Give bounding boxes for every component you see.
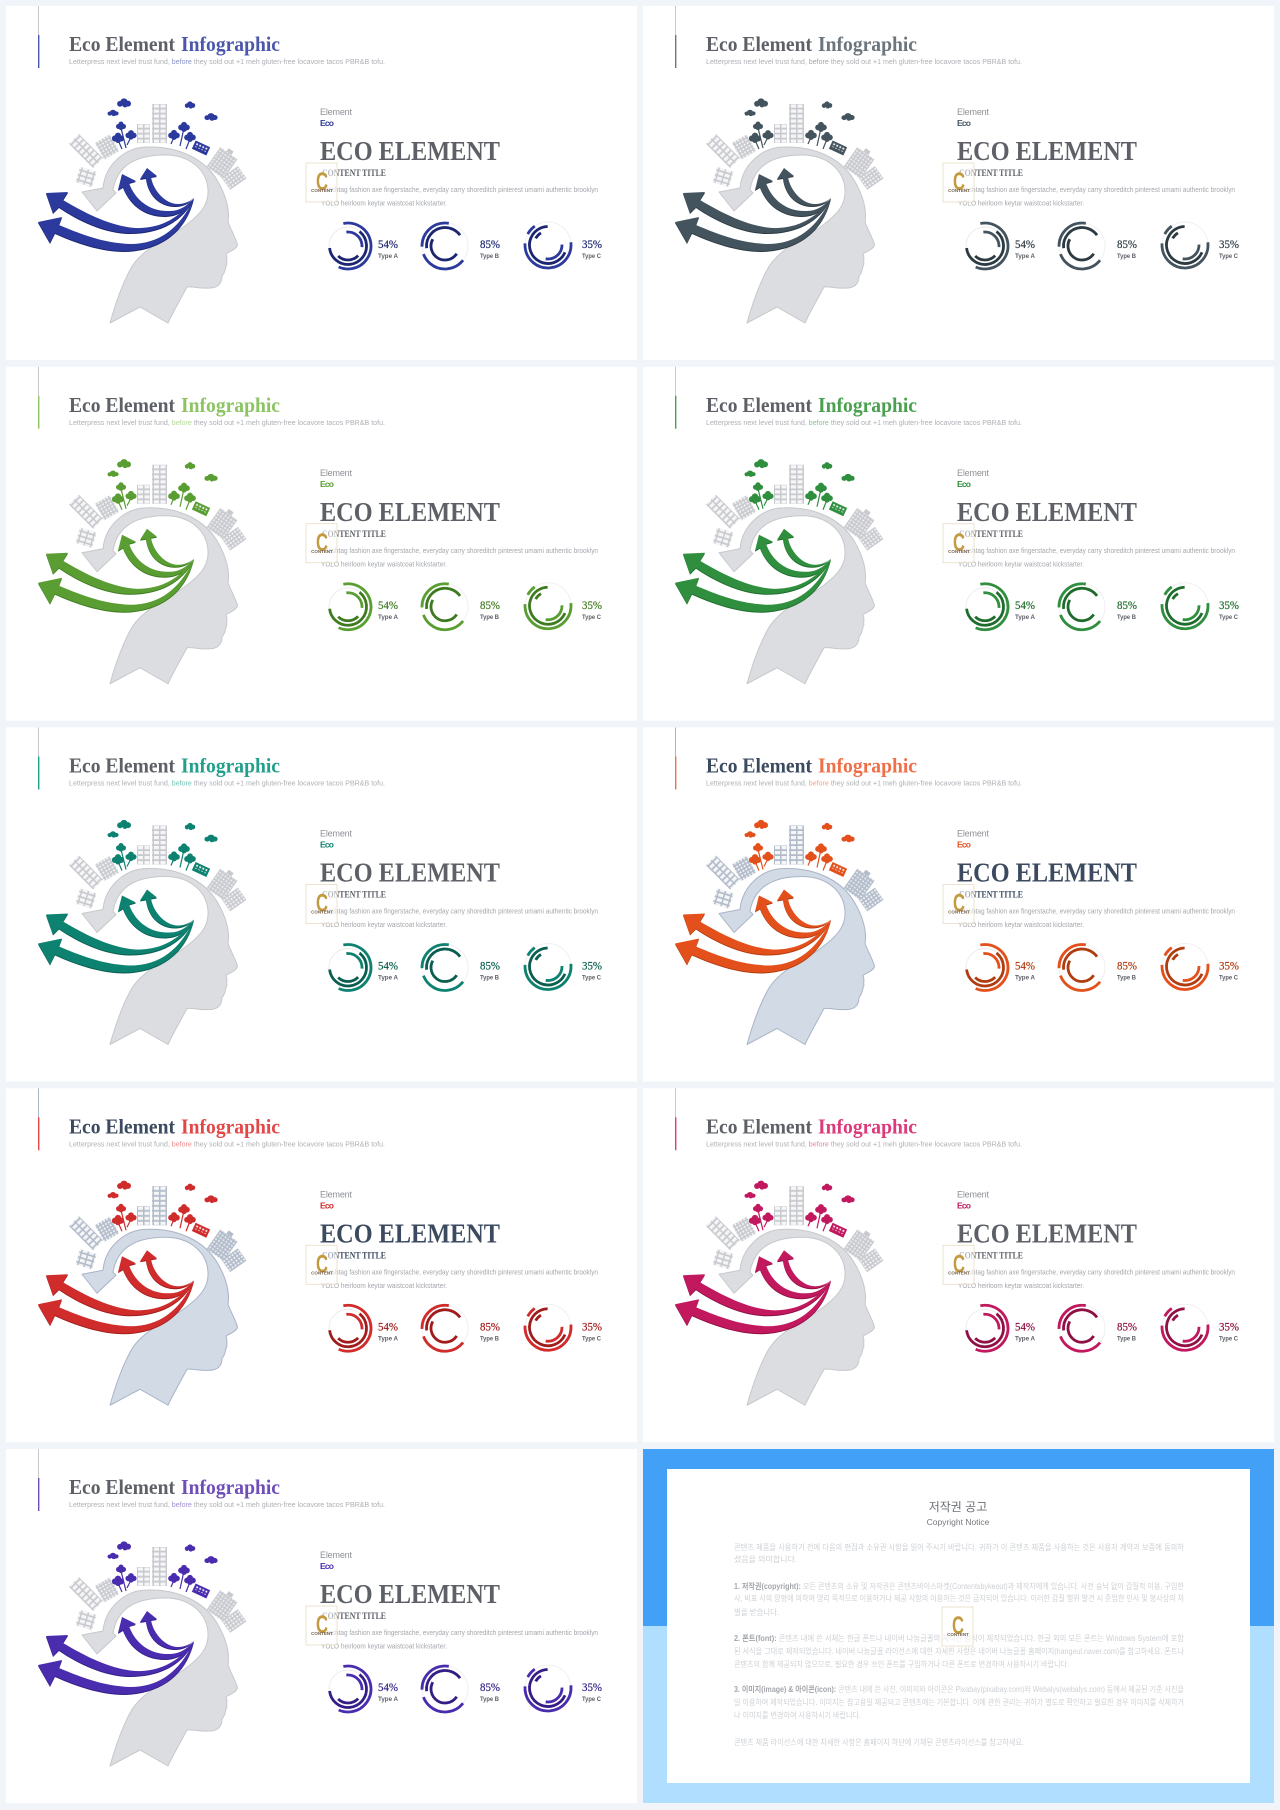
text block: YOLO heirloom keytar waistcoat kickstarter. <box>958 920 1084 929</box>
donut chart B: 85% <box>480 1321 500 1333</box>
accent line <box>38 6 39 68</box>
accent line <box>675 728 676 790</box>
donut chart B: Type B <box>480 974 499 982</box>
text block: CONTENT TITLE <box>959 890 1023 900</box>
text block: Eco <box>320 479 334 489</box>
notice body text: 콘텐츠의 함께 제공되지 않으므로, 필요한 경우 쓰인 폰트를 구입하거나 다른 폰트로 변경하여 사용하시기 바랍니다. <box>734 1659 1069 1669</box>
donut chart B: 85% <box>480 960 500 972</box>
heading: Eco Element <box>69 1114 175 1138</box>
text block <box>320 828 598 929</box>
text block <box>957 1189 1235 1290</box>
watermark <box>943 163 974 202</box>
donut chart C <box>517 1296 602 1359</box>
donut chart B <box>413 1296 500 1361</box>
watermark <box>943 1245 974 1284</box>
illustration: head with arrows and city <box>38 459 246 684</box>
donut chart B: Type B <box>1117 253 1136 260</box>
text block: ECO ELEMENT <box>320 1579 500 1609</box>
text block <box>957 107 1235 208</box>
accent line <box>38 728 39 790</box>
donut chart A: Type A <box>1015 253 1035 260</box>
heading: Eco Element <box>706 1114 812 1138</box>
donut chart C <box>1154 935 1239 998</box>
text block: Eco <box>320 118 334 128</box>
notice body text: 3. 이미지(image) & 아이콘(icon): 콘텐츠 내에 쓴 사진, 이미지와 아이콘은 Pixabay(pixabay.com)와 Webalys(webalys.com) 등에서 제공된 기준 사진을 <box>734 1684 1184 1694</box>
heading: Eco Element <box>69 32 175 56</box>
heading: Eco Element <box>706 32 812 56</box>
text block: YOLO heirloom keytar waistcoat kickstarter. <box>321 559 447 568</box>
donut chart A: 54% <box>1015 1321 1035 1333</box>
donut chart C: Type C <box>1219 974 1238 982</box>
text block: ECO ELEMENT <box>320 136 500 166</box>
notice body text: 벌을 받습니다. <box>734 1607 779 1617</box>
accent line <box>675 367 676 429</box>
notice body text: 1. 저작권(copyright): 모든 콘텐츠의 소유 및 저작권은 콘텐츠바이스마켓(Contentsbykeout)과 제작자에게 있습니다. 사전 승낙 없이 갑질적 이용, 구입한 <box>734 1581 1185 1591</box>
donut chart C: 35% <box>582 960 602 972</box>
donut chart B: Type B <box>1117 1335 1136 1342</box>
donut chart C: 35% <box>582 239 602 251</box>
text block: ECO ELEMENT <box>320 858 500 888</box>
text block <box>957 468 1235 568</box>
donut chart C: 35% <box>582 600 602 612</box>
text block: Element <box>320 1189 352 1199</box>
text block: Element <box>320 828 352 838</box>
notice body text <box>734 1542 1185 1747</box>
text block: CONTENT TITLE <box>322 890 386 900</box>
donut chart C <box>1154 1296 1239 1359</box>
text block: CONTENT TITLE <box>959 1251 1023 1261</box>
text block <box>320 468 598 568</box>
donut chart A <box>958 941 1035 994</box>
text block: ECO ELEMENT <box>957 858 1137 888</box>
donut chart A: Type A <box>378 253 398 260</box>
heading: Eco Element <box>69 1475 175 1499</box>
subtitle: Letterpress next level trust fund, before they sold out +1 meh gluten-free locavore tacos PBR&B tofu. <box>69 778 385 788</box>
text block: #Hashtag fashion axe fingerstache, everyday carry shoreditch pinterest umami authentic brooklyn <box>320 185 598 194</box>
donut chart B <box>1050 574 1137 639</box>
text block: YOLO heirloom keytar waistcoat kickstarter. <box>321 1642 447 1650</box>
watermark <box>306 163 337 202</box>
heading: Infographic <box>181 393 280 417</box>
text block: Eco <box>957 840 971 850</box>
illustration: head with arrows and city <box>38 1181 246 1405</box>
illustration: head with arrows and city <box>675 1181 883 1405</box>
heading: Infographic <box>818 754 917 778</box>
heading: Infographic <box>818 1114 917 1138</box>
panel: orange infographic <box>643 728 1274 1082</box>
donut chart C: Type C <box>582 974 601 982</box>
donut chart B <box>1050 214 1137 278</box>
notice subtitle: Copyright Notice <box>927 1517 990 1527</box>
text block: Eco <box>320 1561 334 1571</box>
donut chart A: 54% <box>378 600 398 612</box>
text block: CONTENT TITLE <box>322 169 386 179</box>
text block: Eco <box>320 840 334 850</box>
heading: Infographic <box>181 754 280 778</box>
text block: Element <box>957 468 989 478</box>
donut chart C: Type C <box>582 614 601 621</box>
donut chart C: 35% <box>582 1682 602 1694</box>
illustration: head with arrows and city <box>38 98 246 323</box>
text block: YOLO heirloom keytar waistcoat kickstarter. <box>958 198 1084 208</box>
donut chart B: Type B <box>1117 614 1136 621</box>
text block: CONTENT TITLE <box>322 530 386 540</box>
text block <box>320 1550 598 1650</box>
donut chart A: Type A <box>378 614 398 621</box>
donut chart C <box>517 1657 602 1719</box>
donut chart B: 85% <box>480 600 500 612</box>
donut chart A <box>958 219 1035 273</box>
donut chart A: 54% <box>1015 239 1035 251</box>
donut chart A: 54% <box>378 960 398 972</box>
notice body text: 사, 비표 사의 양형에 의하여 영리 목적으로 이용하거나 제공 사항의 이용하는 것은 금지되어 있습니다. 이러한 갑질 행위 발견 시 준엄한 민사 및 형사상의 처 <box>734 1593 1184 1603</box>
donut chart B: Type B <box>480 1335 499 1342</box>
watermark <box>942 1607 973 1646</box>
accent line <box>38 1088 39 1150</box>
heading: Infographic <box>818 393 917 417</box>
text block: ECO ELEMENT <box>320 497 500 527</box>
accent line <box>38 367 39 429</box>
text block: #Hashtag fashion axe fingerstache, everyday carry shoreditch pinterest umami authentic brooklyn <box>957 546 1235 555</box>
notice body text: 셨음을 의미합니다. <box>734 1554 797 1564</box>
heading: Eco Element <box>69 754 175 778</box>
heading: Eco Element <box>706 393 812 417</box>
donut chart C <box>517 935 602 998</box>
text block: YOLO heirloom keytar waistcoat kickstarter. <box>958 1281 1084 1290</box>
watermark <box>943 524 974 563</box>
donut chart A <box>321 219 398 273</box>
panel: blue infographic <box>6 6 637 360</box>
text block: Eco <box>957 479 971 489</box>
donut chart B: 85% <box>1117 239 1137 251</box>
text block: YOLO heirloom keytar waistcoat kickstarter. <box>958 559 1084 568</box>
text block: CONTENT TITLE <box>959 169 1023 179</box>
donut chart B: 85% <box>480 1682 500 1694</box>
donut chart A: 54% <box>1015 960 1035 972</box>
subtitle: Letterpress next level trust fund, before they sold out +1 meh gluten-free locavore tacos PBR&B tofu. <box>69 418 385 427</box>
notice body text: 2. 폰트(font): 콘텐츠 내에 쓴 서체는 한글 폰트나 네이버 나눔글꼴의 제작한 양식이 제작되었습니다. 한글 외의 모든 폰트는 Windows System에 포함 <box>734 1633 1185 1643</box>
donut chart B <box>413 935 500 1000</box>
heading: Infographic <box>181 32 280 56</box>
heading <box>706 1114 917 1138</box>
heading <box>706 393 917 417</box>
text block: CONTENT TITLE <box>959 530 1023 540</box>
text block: Element <box>320 1550 352 1560</box>
donut chart A: Type A <box>1015 974 1035 982</box>
donut chart C: Type C <box>582 1696 601 1703</box>
text block: Element <box>957 1189 989 1199</box>
donut chart A: Type A <box>378 1335 398 1342</box>
watermark <box>943 884 974 924</box>
heading <box>706 32 917 56</box>
donut chart A <box>321 1302 398 1355</box>
text block <box>957 828 1235 929</box>
text block: ECO ELEMENT <box>320 1218 500 1248</box>
text block: #Hashtag fashion axe fingerstache, everyday carry shoreditch pinterest umami authentic brooklyn <box>320 1267 598 1276</box>
donut chart A: 54% <box>378 1321 398 1333</box>
donut chart C: 35% <box>1219 239 1239 251</box>
text block <box>320 107 598 208</box>
donut chart B <box>413 574 500 639</box>
donut chart C: Type C <box>582 1335 601 1342</box>
donut chart B <box>1050 935 1137 1000</box>
text block: Element <box>957 828 989 838</box>
donut chart A: 54% <box>378 239 398 251</box>
donut chart A <box>958 1302 1035 1355</box>
donut chart C <box>1154 574 1239 637</box>
heading: Infographic <box>181 1475 280 1499</box>
notice body text: 콘텐츠 제품 라이선스에 대한 자세한 사항은 홈페이지 하단에 기재된 콘텐츠라이선스를 참고하세요. <box>734 1737 1024 1747</box>
donut chart C: 35% <box>1219 1321 1239 1333</box>
donut chart A: Type A <box>1015 614 1035 621</box>
text block: #Hashtag fashion axe fingerstache, everyday carry shoreditch pinterest umami authentic brooklyn <box>320 546 598 555</box>
subtitle: Letterpress next level trust fund, before they sold out +1 meh gluten-free locavore tacos PBR&B tofu. <box>69 1500 385 1509</box>
text block: #Hashtag fashion axe fingerstache, everyday carry shoreditch pinterest umami authentic brooklyn <box>957 185 1235 194</box>
donut chart A <box>321 941 398 994</box>
notice body text: 나 이미지를 변경하여 사용하시기 바랍니다. <box>734 1710 861 1720</box>
text block: Eco <box>957 118 971 128</box>
illustration: head with arrows and city <box>38 1541 246 1766</box>
donut chart C: Type C <box>582 253 601 260</box>
watermark <box>306 1606 337 1645</box>
text block: Eco <box>957 1200 971 1210</box>
notice body text: 된 서식을 그대로 제작되었습니다. 네이버 나눔글꼴 라이선스에 대한 자세한 사항은 네이버 나눔글꼴 홈페이지(hangeul.naver.com)를 참고하세요. 폰트나 <box>734 1646 1185 1656</box>
donut chart B: Type B <box>480 253 499 260</box>
panel: light green infographic <box>6 367 637 721</box>
donut chart A <box>958 580 1035 633</box>
text block: CONTENT TITLE <box>322 1251 386 1261</box>
subtitle: Letterpress next level trust fund, before they sold out +1 meh gluten-free locavore tacos PBR&B tofu. <box>706 1139 1022 1148</box>
watermark <box>306 1245 337 1284</box>
illustration: head with arrows and city <box>675 820 883 1044</box>
donut chart C: Type C <box>1219 1335 1238 1342</box>
donut chart A: Type A <box>1015 1335 1035 1342</box>
panel: slate infographic <box>643 6 1274 360</box>
panel: green infographic <box>643 367 1274 721</box>
notice body text: 일 이용하여 제작되었습니다. 이미지는 참고용일 제공되고 콘텐츠에는 기본합니다. 이에 관한 권리는 귀하가 별도로 확인하고 필요한 경우 이미지를 삭제하거 <box>734 1697 1184 1707</box>
donut chart C: 35% <box>1219 600 1239 612</box>
watermark <box>306 884 337 924</box>
panel: red infographic <box>6 1088 637 1442</box>
accent line <box>38 1449 39 1511</box>
donut chart B <box>413 1657 500 1721</box>
illustration: head with arrows and city <box>675 98 883 323</box>
donut chart A: 54% <box>378 1682 398 1694</box>
donut chart C <box>517 214 602 276</box>
text block <box>320 1189 598 1290</box>
donut chart C: 35% <box>1219 960 1239 972</box>
donut chart B <box>1050 1296 1137 1361</box>
text block: YOLO heirloom keytar waistcoat kickstarter. <box>321 198 447 208</box>
donut chart A: Type A <box>378 1696 398 1703</box>
donut chart A <box>321 1662 398 1716</box>
donut chart B: 85% <box>1117 960 1137 972</box>
text block: CONTENT TITLE <box>322 1612 386 1622</box>
donut chart C: Type C <box>1219 253 1238 260</box>
heading <box>69 32 280 56</box>
text block: YOLO heirloom keytar waistcoat kickstarter. <box>321 1281 447 1290</box>
donut chart C: 35% <box>582 1321 602 1333</box>
panel: teal infographic <box>6 728 637 1082</box>
subtitle: Letterpress next level trust fund, before they sold out +1 meh gluten-free locavore tacos PBR&B tofu. <box>706 418 1022 427</box>
watermark <box>306 524 337 563</box>
subtitle: Letterpress next level trust fund, before they sold out +1 meh gluten-free locavore tacos PBR&B tofu. <box>69 1139 385 1148</box>
heading <box>69 1475 280 1499</box>
donut chart C <box>517 574 602 637</box>
donut chart A: 54% <box>1015 600 1035 612</box>
donut chart B <box>413 214 500 278</box>
illustration: head with arrows and city <box>38 820 246 1044</box>
donut chart B: Type B <box>480 614 499 621</box>
heading: Eco Element <box>69 393 175 417</box>
donut chart B: Type B <box>1117 974 1136 982</box>
heading <box>69 1114 280 1138</box>
heading: Eco Element <box>706 754 812 778</box>
text block: ECO ELEMENT <box>957 497 1137 527</box>
donut chart C <box>1154 214 1239 276</box>
text block: Element <box>320 107 352 117</box>
panel: purple infographic <box>6 1449 637 1803</box>
text block: #Hashtag fashion axe fingerstache, everyday carry shoreditch pinterest umami authentic brooklyn <box>320 906 598 916</box>
panel: magenta infographic <box>643 1088 1274 1442</box>
notice body text: 콘텐츠 제품을 사용하기 전에 다음의 편집과 소유권 사항을 읽어 주시기 바랍니다. 귀하가 이 콘텐츠 제품을 사용하는 것은 사용자 계약과 보증에 동의하 <box>734 1542 1185 1552</box>
donut chart A: Type A <box>378 974 398 982</box>
donut chart B: 85% <box>1117 600 1137 612</box>
text block: Element <box>320 468 352 478</box>
subtitle: Letterpress next level trust fund, before they sold out +1 meh gluten-free locavore tacos PBR&B tofu. <box>706 778 1022 788</box>
notice title: 저작권 공고 <box>929 1500 987 1514</box>
donut chart A <box>321 580 398 633</box>
heading <box>706 754 917 778</box>
subtitle: Letterpress next level trust fund, before they sold out +1 meh gluten-free locavore tacos PBR&B tofu. <box>69 57 385 66</box>
subtitle: Letterpress next level trust fund, before they sold out +1 meh gluten-free locavore tacos PBR&B tofu. <box>706 57 1022 66</box>
text block: Element <box>957 107 989 117</box>
accent line <box>675 1088 676 1150</box>
text block: ECO ELEMENT <box>957 136 1137 166</box>
text block: #Hashtag fashion axe fingerstache, everyday carry shoreditch pinterest umami authentic brooklyn <box>320 1628 598 1637</box>
illustration: head with arrows and city <box>675 459 883 684</box>
donut chart B: 85% <box>480 239 500 251</box>
accent line <box>675 6 676 68</box>
text block: #Hashtag fashion axe fingerstache, everyday carry shoreditch pinterest umami authentic brooklyn <box>957 906 1235 916</box>
text block: YOLO heirloom keytar waistcoat kickstarter. <box>321 920 447 929</box>
text block: #Hashtag fashion axe fingerstache, everyday carry shoreditch pinterest umami authentic brooklyn <box>957 1267 1235 1276</box>
donut chart B: Type B <box>480 1696 499 1703</box>
heading: Infographic <box>181 1114 280 1138</box>
heading <box>69 393 280 417</box>
donut chart B: 85% <box>1117 1321 1137 1333</box>
heading: Infographic <box>818 32 917 56</box>
panel: copyright notice <box>643 1449 1274 1803</box>
text block: ECO ELEMENT <box>957 1218 1137 1248</box>
text block: Eco <box>320 1200 334 1210</box>
donut chart C: Type C <box>1219 614 1238 621</box>
heading <box>69 754 280 778</box>
